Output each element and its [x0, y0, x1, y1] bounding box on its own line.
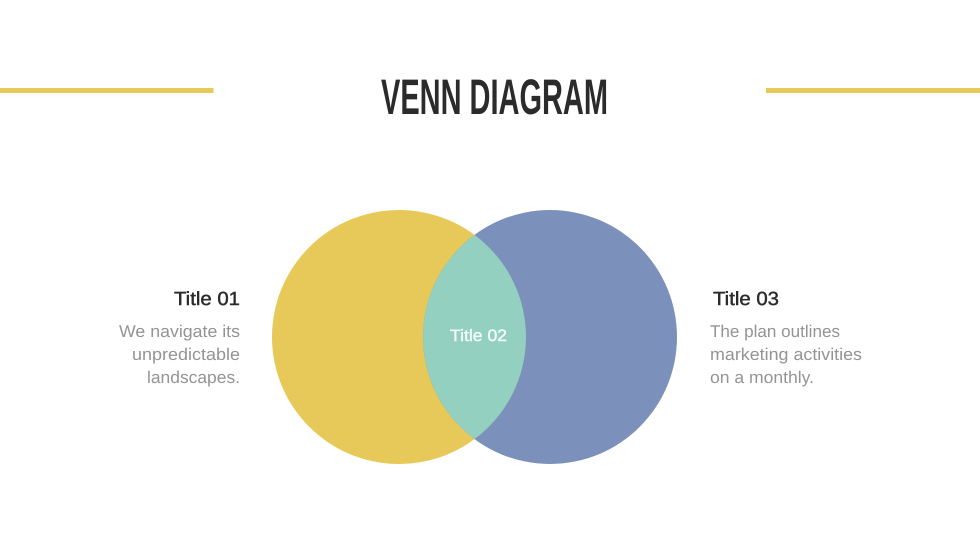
- circle: right blue: [423, 210, 677, 464]
- text block: title 03: [710, 289, 862, 387]
- description: title 01: [119, 322, 240, 387]
- right accent bar: [766, 88, 980, 93]
- overlap region: [423, 235, 526, 439]
- venn diagram: [272, 210, 677, 464]
- heading: title 03: Title 03: [713, 289, 779, 310]
- circle: left yellow: [272, 210, 526, 464]
- description: title 03: [710, 322, 862, 387]
- description: title 03: on a monthly.: [710, 368, 814, 387]
- overlap label: Title 02: [450, 327, 507, 345]
- description: title 01: unpredictable: [132, 345, 240, 364]
- description: title 03: The plan outlines: [710, 322, 840, 341]
- text block: title 01: [119, 289, 240, 387]
- description: title 03: marketing activities: [710, 345, 862, 364]
- description: title 01: landscapes.: [147, 368, 240, 387]
- heading: title 01: Title 01: [174, 289, 240, 310]
- left accent bar: [0, 88, 214, 93]
- description: title 01: We navigate its: [119, 322, 240, 341]
- title: VENN DIAGRAM: [381, 69, 608, 125]
